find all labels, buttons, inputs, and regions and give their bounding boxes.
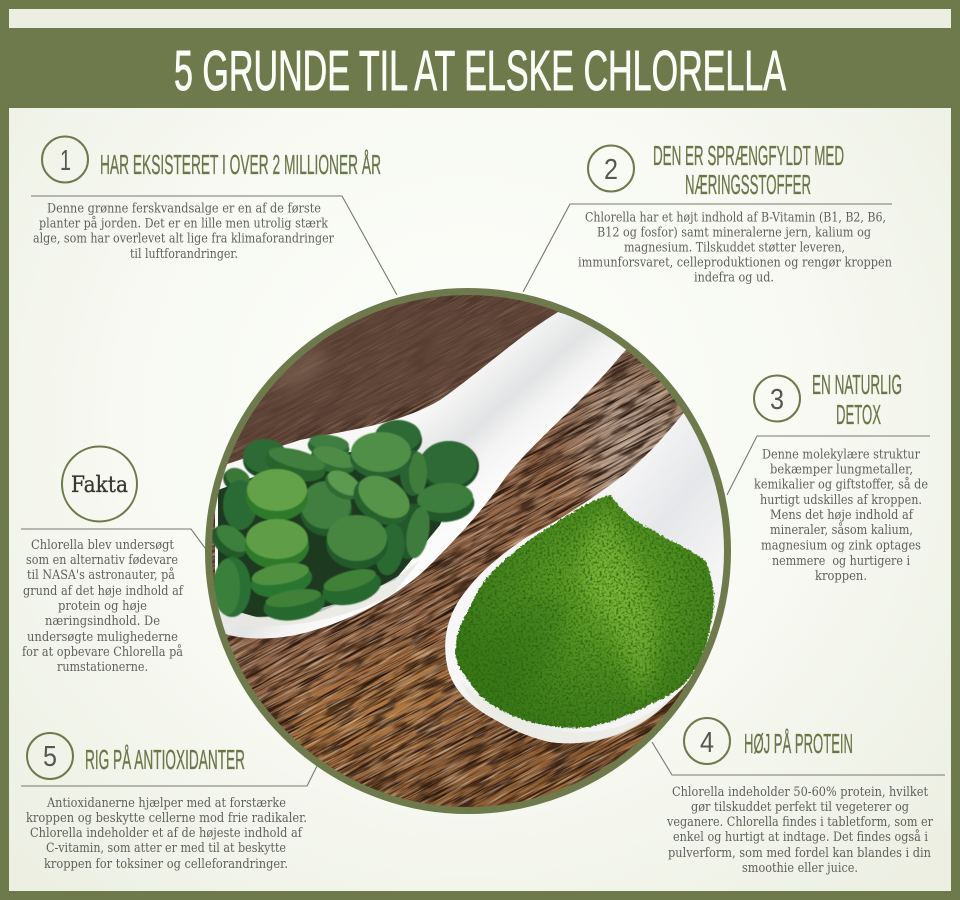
body text 4: enkel og hurtigt at indtage. Det findes også i xyxy=(673,829,928,845)
body text 1: til luftforandringer. xyxy=(130,247,238,262)
connector 3 xyxy=(727,436,930,495)
blurred upper table xyxy=(228,295,558,464)
section 3 xyxy=(727,369,930,584)
central photo: spoons with chlorella xyxy=(205,288,731,814)
body text 3: kroppen. xyxy=(815,569,867,584)
body text 4: gør tilskuddet perfekt til vegeterer og xyxy=(691,800,909,815)
photo content clipped to circle xyxy=(212,295,724,807)
section 1: HAR EKSISTERET I OVER 2 MILLIONER ÅR xyxy=(100,149,381,180)
body text 1: alge, som har overlevet alt lige fra klimaforandringer xyxy=(33,232,335,246)
section 1 xyxy=(31,136,397,295)
body text 2 xyxy=(578,211,893,286)
body text 5: Chlorella indeholder et af de højeste indhold af xyxy=(30,826,303,841)
fakta body text: rumstationerne. xyxy=(57,660,148,675)
number circle 4 xyxy=(684,718,730,764)
section 5 xyxy=(21,733,317,872)
body text 5: kroppen og beskytte cellerne mod frie radikaler. xyxy=(26,811,307,826)
section 2 xyxy=(523,140,893,292)
body text 5: kroppen for toksiner og celleforandringer. xyxy=(44,857,288,872)
heading 3 xyxy=(812,369,902,430)
fakta body text xyxy=(22,538,184,675)
body text 3: Mens det høje indhold af xyxy=(770,508,914,523)
heading 2: NÆRINGSSTOFFER xyxy=(685,169,811,200)
fakta body text: undersøgte mulighederne xyxy=(27,630,178,645)
body text 1 xyxy=(33,202,335,262)
body text 3 xyxy=(754,447,928,584)
section fakta xyxy=(21,446,205,675)
body text 3: bekæmper lungmetaller, xyxy=(770,463,913,478)
fakta body text: Chlorella blev undersøgt xyxy=(31,538,175,553)
number circle 4: 4 xyxy=(700,727,714,759)
heading 3: DETOX xyxy=(836,399,881,430)
fakta circle xyxy=(62,446,137,522)
fakta body text: for at opbevare Chlorella på xyxy=(22,644,183,660)
body text 2: immunforsvaret, celleproduktionen og rengør kroppen xyxy=(578,256,893,271)
inner spoon shadow xyxy=(215,560,420,626)
dark mass under tablets xyxy=(218,452,442,618)
fakta body text: grund af det høje indhold af xyxy=(23,584,184,599)
body text 2: magnesium. Tilskuddet støtter leveren, xyxy=(624,241,845,256)
fakta body text: til NASA's astronauter, på xyxy=(27,567,175,583)
lower spoon base shadow xyxy=(460,680,675,743)
body text 3: mineraler, såsom kalium, xyxy=(770,522,913,538)
fakta body text: som en alternativ fødevare xyxy=(26,553,178,568)
body text 4 xyxy=(666,785,934,876)
body text 4: Chlorella indeholder 50-60% protein, hvilket xyxy=(672,785,929,800)
number circle 2: 2 xyxy=(604,154,618,186)
connector 4 xyxy=(652,742,945,775)
body text 4: smoothie eller juice. xyxy=(742,861,858,876)
number circle 3 xyxy=(754,376,800,422)
fakta connector xyxy=(21,529,205,548)
body text 3: nemmere og hurtigere i xyxy=(772,554,910,569)
body text 3: hurtigt udskilles af kroppen. xyxy=(760,493,922,508)
body text 1: planter på jorden. Det er en lille men utrolig stærk xyxy=(39,216,328,232)
number circle 3: 3 xyxy=(770,384,784,416)
circle ring xyxy=(208,292,728,810)
connector 2 xyxy=(523,204,892,292)
connector 1 xyxy=(31,196,397,295)
body text 2: Chlorella har et højt indhold af B-Vitamin (B1, B2, B6, xyxy=(585,211,886,226)
upper spoon xyxy=(215,312,640,639)
number circle 1 xyxy=(42,136,88,182)
body text 5: Antioxidanerne hjælper med at forstærke xyxy=(46,796,286,811)
lower spoon xyxy=(445,405,745,743)
body text 5 xyxy=(26,796,307,872)
wood table xyxy=(212,295,690,807)
heading 2 xyxy=(653,140,844,200)
connector 5 xyxy=(21,766,317,786)
body text 3: Denne molekylære struktur xyxy=(762,447,921,462)
body text 3: kemikalier og giftstoffer, så de xyxy=(754,477,928,493)
section 4 xyxy=(652,718,945,876)
fakta body text: protein og høje xyxy=(58,599,147,614)
section 5: RIG PÅ ANTIOXIDANTER xyxy=(85,744,245,775)
body text 2: indefra og ud. xyxy=(694,271,774,286)
body text 2: B12 og fosfor) samt mineralerne jern, kalium og xyxy=(597,226,871,241)
body text 3: magnesium og zink optages xyxy=(761,538,921,553)
fakta circle: Fakta xyxy=(71,473,128,498)
tablets xyxy=(205,420,479,625)
top light band xyxy=(9,9,951,28)
chlorella powder xyxy=(455,495,714,728)
number circle 1: 1 xyxy=(60,145,71,177)
body text 4: pulverform, som med fordel kan blandes i din xyxy=(668,846,932,861)
fakta body text: næringsindhold. De xyxy=(45,614,160,629)
number circle 5 xyxy=(27,733,73,779)
body text 5: C-vitamin, som atter er med til at beskytte xyxy=(46,841,286,856)
body text 1: Denne grønne ferskvandsalge er en af de første xyxy=(47,202,321,217)
number circle 5: 5 xyxy=(43,741,57,773)
number circle 2 xyxy=(588,146,634,192)
